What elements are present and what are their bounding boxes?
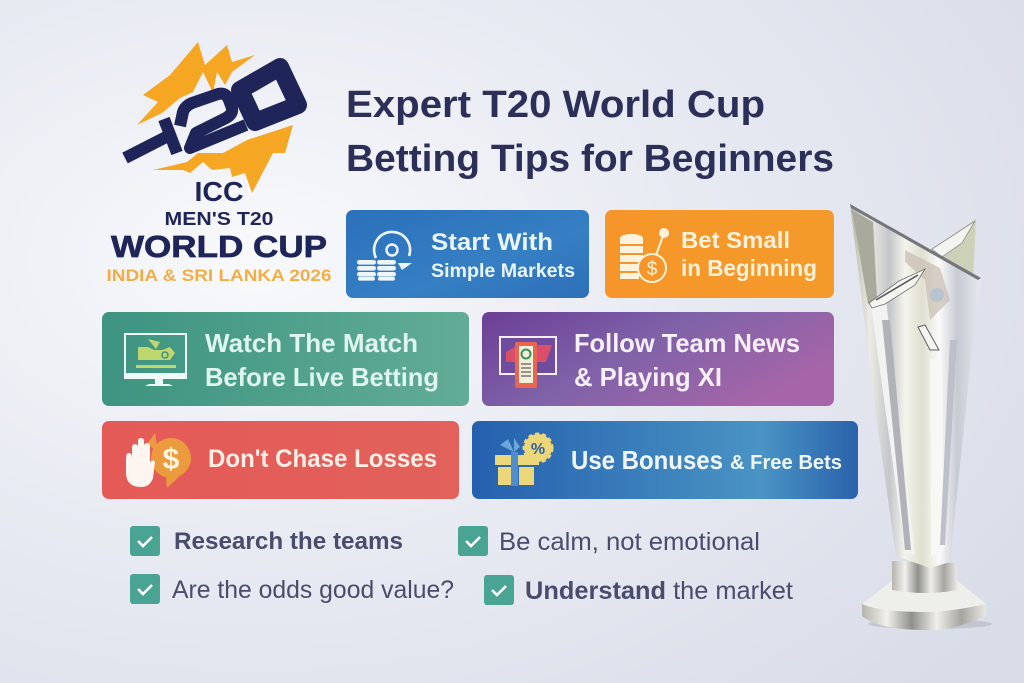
icon: coins and target [357,232,412,281]
text: Start With [431,229,553,256]
text: Watch The Match [205,328,418,358]
text: World Cup: WORLD CUP [111,229,327,264]
panel: bet small in beginning [605,210,834,298]
left blade shading [852,210,877,304]
icon: orange lightning burst, bottom [153,125,293,193]
back spike [932,219,976,280]
text [574,328,800,392]
icon: monitor [124,334,187,386]
icon: T20 cricket bat mark [125,67,298,158]
text: India & Sri Lanka 2026: INDIA & SRI LANKA 2026 [106,266,332,285]
text [205,328,439,392]
check: research the teams: Research the teams [174,528,403,555]
shadow [868,619,992,629]
icon: coin stack and dollar [620,228,669,282]
reflections [905,250,950,320]
icon: orange lightning burst, top [137,42,255,125]
text: Follow Team News [574,328,800,358]
panel: use bonuses and free bets [472,421,858,499]
check: be calm: Be calm, not emotional [499,528,760,556]
T crossbar [164,119,177,153]
text: ICC: ICC [194,176,244,207]
title: Expert T20 World Cup [346,84,765,126]
icon: hand and dollar [126,433,191,488]
numeral 0 [240,67,298,122]
panel: follow team news [482,312,834,406]
logo: ICC Men's T20 World Cup [106,42,332,285]
T handle [125,134,172,158]
title [346,84,834,180]
icon: screen and phone [500,337,556,388]
title: Betting Tips for Beginners [346,138,834,180]
check: odds value: Are the odds good value? [172,576,454,604]
text [681,227,817,281]
text: Men's T20: MEN'S T20 [164,209,274,229]
text: Don't Chase Losses [208,445,437,473]
text [431,229,575,282]
collar [892,561,957,593]
trophy [850,204,992,630]
icon: gift and percent badge [495,434,552,486]
panel: start with simple markets [346,210,589,298]
text: & Free Bets [730,452,842,474]
icon: coin stack and dollar: $ [647,259,658,280]
text: in Beginning [681,255,817,281]
main body [850,204,981,568]
text: Use Bonuses [571,445,723,475]
icon: gift and percent badge: % [531,441,545,458]
text: & Playing XI [574,362,722,392]
numeral 2 [180,94,246,148]
front blade tips [869,269,925,308]
text [571,445,842,475]
checklist [130,526,793,605]
text: Simple Markets [431,261,575,282]
text: Before Live Betting [205,362,439,392]
text: Bet Small [681,227,790,253]
icon: hand and dollar: $ [163,443,180,476]
panel: watch the match [102,312,469,406]
base disc [862,580,986,630]
panel: don't chase losses [102,421,459,499]
check: understand market: Understand the market [525,577,793,605]
